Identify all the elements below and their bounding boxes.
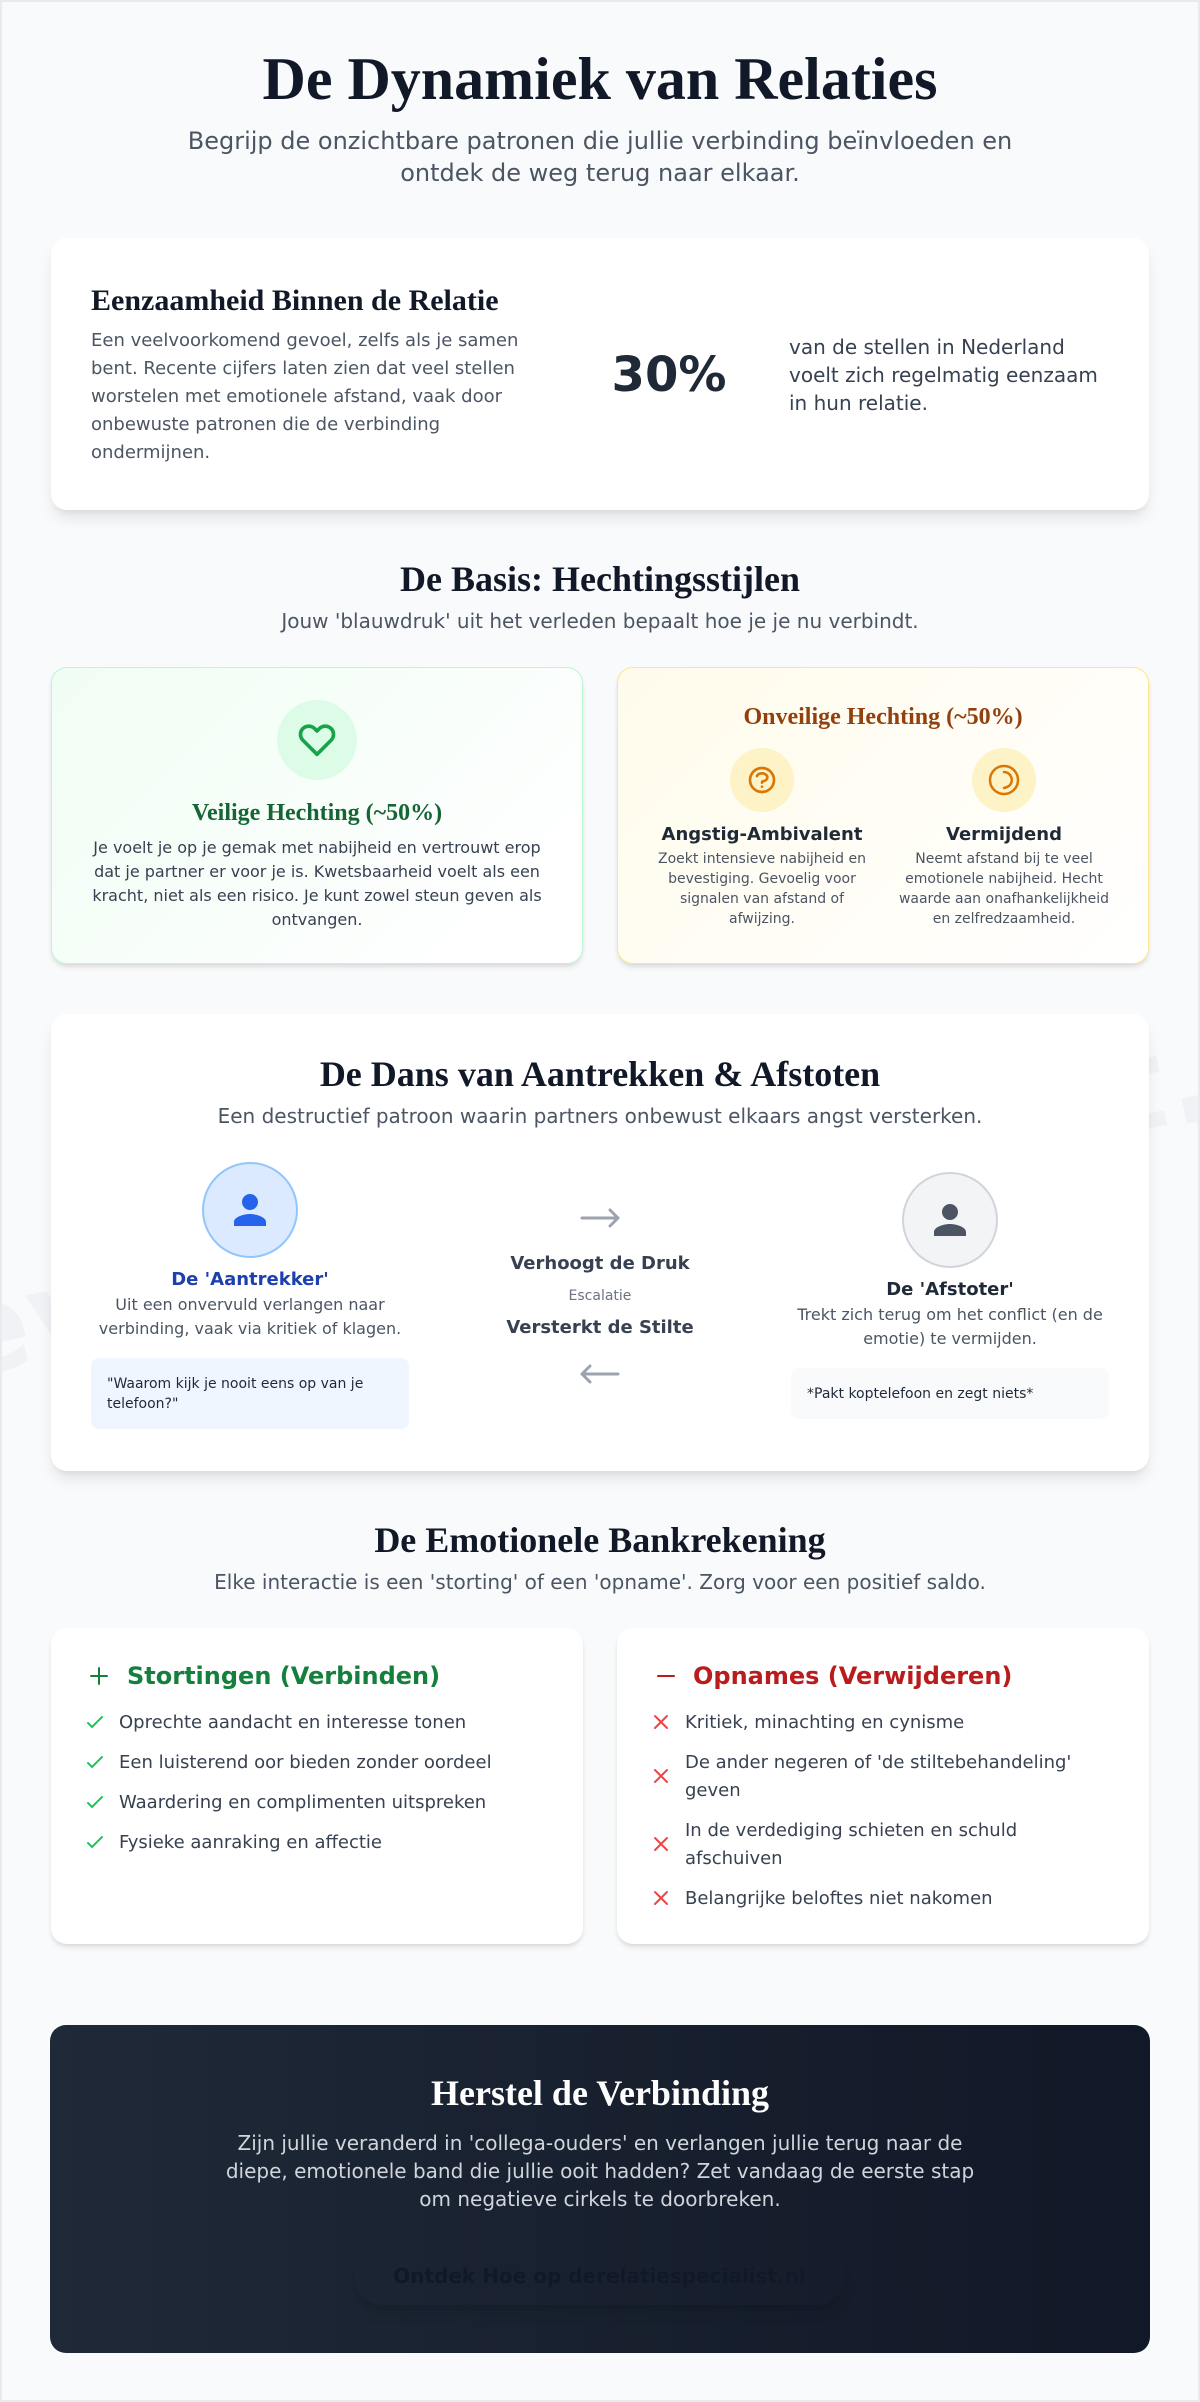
list: deposits xyxy=(87,1712,492,1853)
subheading: attachment styles: Jouw 'blauwdruk' uit het verleden bepaalt hoe je je nu verbindt. xyxy=(281,609,919,633)
text: call to action: Zijn jullie veranderd in 'collega-ouders' en verlangen jullie terug naar de xyxy=(238,2131,962,2155)
panel: pursue and withdraw dance xyxy=(51,1014,1149,1471)
text: anxious ambivalent description xyxy=(658,851,866,927)
item 3 xyxy=(685,1820,1017,1869)
item 2: geven xyxy=(685,1780,741,1801)
item 4: Belangrijke beloftes niet nakomen xyxy=(685,1888,993,1909)
heading: emotional bank account: De Emotionele Bankrekening xyxy=(374,1520,826,1560)
subheading: emotional bank account: Elke interactie is een 'storting' of een 'opname'. Zorg voor een positief saldo. xyxy=(214,1570,986,1594)
cross icon 4 xyxy=(654,1891,668,1905)
item 2 xyxy=(685,1752,1071,1801)
text: pursuer description: Uit een onvervuld verlangen naar xyxy=(115,1295,385,1314)
label: escalation: Escalatie xyxy=(569,1288,631,1304)
text: call to action: om negatieve cirkels te doorbreken. xyxy=(419,2187,781,2211)
text: statistic caption: voelt zich regelmatig eenzaam xyxy=(789,363,1098,387)
text: loneliness description: Een veelvoorkomend gevoel, zelfs als je samen xyxy=(91,330,518,351)
panel: withdrawals xyxy=(617,1628,1149,1944)
subtitle xyxy=(188,127,1012,187)
panel: loneliness statistic xyxy=(51,238,1149,510)
text: loneliness description: ondermijnen. xyxy=(91,442,210,463)
text: secure attachment description xyxy=(92,838,542,929)
heading: dance: De Dans van Aantrekken & Afstoten xyxy=(320,1054,880,1094)
text: secure attachment description: ontvangen. xyxy=(272,910,362,929)
text: loneliness description: worstelen met emotionele afstand, vaak door xyxy=(91,386,502,407)
heading: secure attachment: Veilige Hechting (~50%) xyxy=(192,800,442,826)
text: withdrawer description xyxy=(797,1305,1103,1348)
heading: withdrawer: De 'Afstoter' xyxy=(886,1279,1014,1300)
callout: withdrawer action: *Pakt koptelefoon en zegt niets* xyxy=(807,1386,1033,1402)
panel: insecure attachment xyxy=(617,667,1149,964)
icon: pursuer xyxy=(202,1162,298,1258)
item 3: Waardering en complimenten uitspreken xyxy=(119,1792,486,1813)
item 2: De ander negeren of 'de stiltebehandeling' xyxy=(685,1752,1071,1773)
text: withdrawer description: Trekt zich terug om het conflict (en de xyxy=(797,1305,1103,1324)
text: secure attachment description: kracht, niet als een risico. Je kunt zowel steun geven als xyxy=(92,886,542,905)
button: discover how xyxy=(354,2249,845,2305)
heading: avoidant: Vermijdend xyxy=(946,824,1062,845)
text: avoidant description: emotionele nabijheid. Hecht xyxy=(905,871,1103,887)
text: pursuer description xyxy=(99,1295,401,1338)
text: avoidant description xyxy=(899,851,1109,927)
text: pursuer description: verbinding, vaak via kritiek of klagen. xyxy=(99,1319,401,1338)
check icon 4 xyxy=(87,1836,103,1848)
icon: withdrawer xyxy=(902,1172,998,1268)
icon: avoidant circle xyxy=(972,748,1036,812)
heading: insecure attachment: Onveilige Hechting (~50%) xyxy=(743,704,1023,730)
statistic: 30 percent: 30% xyxy=(612,347,726,403)
check icon 2 xyxy=(87,1756,103,1768)
text: withdrawer description: emotie) te vermijden. xyxy=(863,1329,1037,1348)
subtitle: Begrijp de onzichtbare patronen die jullie verbinding beïnvloeden en xyxy=(188,127,1012,155)
icon: minus xyxy=(657,1675,675,1677)
panel: secure attachment xyxy=(51,667,583,964)
label: increases pressure: Verhoogt de Druk xyxy=(510,1253,690,1274)
heading: anxious ambivalent: Angstig-Ambivalent xyxy=(662,824,862,845)
text: anxious ambivalent description: afwijzing. xyxy=(729,911,795,927)
item 3: afschuiven xyxy=(685,1848,783,1869)
text: loneliness description: onbewuste patronen die de verbinding xyxy=(91,414,440,435)
text: call to action xyxy=(226,2131,974,2211)
label: reinforces silence: Versterkt de Stilte xyxy=(506,1317,694,1338)
item 1: Oprechte aandacht en interesse tonen xyxy=(119,1712,466,1733)
text: avoidant description: Neemt afstand bij te veel xyxy=(915,851,1093,867)
callout: pursuer quote: telefoon?" xyxy=(107,1396,178,1412)
button: discover how: Ontdek Hoe op derelatiespecialist.nl xyxy=(393,2264,806,2288)
check icon 1 xyxy=(87,1716,103,1728)
text: avoidant description: en zelfredzaamheid. xyxy=(933,911,1075,927)
cross icon 2 xyxy=(654,1769,668,1783)
text: anxious ambivalent description: signalen van afstand of xyxy=(680,891,844,907)
cross icon 3 xyxy=(654,1837,668,1851)
text: secure attachment description: dat je partner er voor je is. Kwetsbaarheid voelt als een xyxy=(94,862,540,881)
title: De Dynamiek van Relaties xyxy=(263,46,937,112)
arrow: left xyxy=(580,1364,620,1384)
item 3: In de verdediging schieten en schuld xyxy=(685,1820,1017,1841)
callout: pursuer quote xyxy=(91,1358,409,1429)
text: statistic caption: in hun relatie. xyxy=(789,391,928,415)
icon: heart xyxy=(277,700,357,780)
text: anxious ambivalent description: bevestiging. Gevoelig voor xyxy=(668,871,856,887)
text: secure attachment description: Je voelt je op je gemak met nabijheid en vertrouwt erop xyxy=(93,838,541,857)
callout: withdrawer action xyxy=(791,1368,1109,1419)
check icon 3 xyxy=(87,1796,103,1808)
heading: withdrawals: Opnames (Verwijderen) xyxy=(693,1662,1012,1690)
panel: call to action xyxy=(50,2025,1150,2353)
heading: deposits: Stortingen (Verbinden) xyxy=(127,1662,440,1690)
item 2: Een luisterend oor bieden zonder oordeel xyxy=(119,1752,492,1773)
item 1: Kritiek, minachting en cynisme xyxy=(685,1712,964,1733)
icon: question mark xyxy=(730,748,794,812)
text: loneliness description: bent. Recente cijfers laten zien dat veel stellen xyxy=(91,358,515,379)
panel: deposits xyxy=(51,1628,583,1944)
item 4: Fysieke aanraking en affectie xyxy=(119,1832,382,1853)
text: loneliness description xyxy=(91,330,518,463)
text: statistic caption: van de stellen in Nederland xyxy=(789,335,1065,359)
cross icon 1 xyxy=(654,1715,668,1729)
heading: pursuer: De 'Aantrekker' xyxy=(171,1269,329,1290)
text: call to action: diepe, emotionele band die jullie ooit hadden? Zet vandaag de eerste stap xyxy=(226,2159,974,2183)
text: statistic caption xyxy=(789,335,1098,415)
subtitle: ontdek de weg terug naar elkaar. xyxy=(400,159,800,187)
text: anxious ambivalent description: Zoekt intensieve nabijheid en xyxy=(658,851,866,867)
subheading: dance: Een destructief patroon waarin partners onbewust elkaars angst versterken. xyxy=(218,1104,982,1128)
arrow: right xyxy=(580,1208,620,1228)
callout: pursuer quote: "Waarom kijk je nooit eens op van je xyxy=(107,1376,363,1392)
text: avoidant description: waarde aan onafhankelijkheid xyxy=(899,891,1109,907)
heading: call to action: Herstel de Verbinding xyxy=(431,2073,769,2113)
heading: loneliness: Eenzaamheid Binnen de Relatie xyxy=(91,284,499,317)
icon: plus xyxy=(90,1667,108,1685)
heading: attachment styles: De Basis: Hechtingsstijlen xyxy=(400,559,800,599)
list: withdrawals xyxy=(654,1712,1071,1909)
